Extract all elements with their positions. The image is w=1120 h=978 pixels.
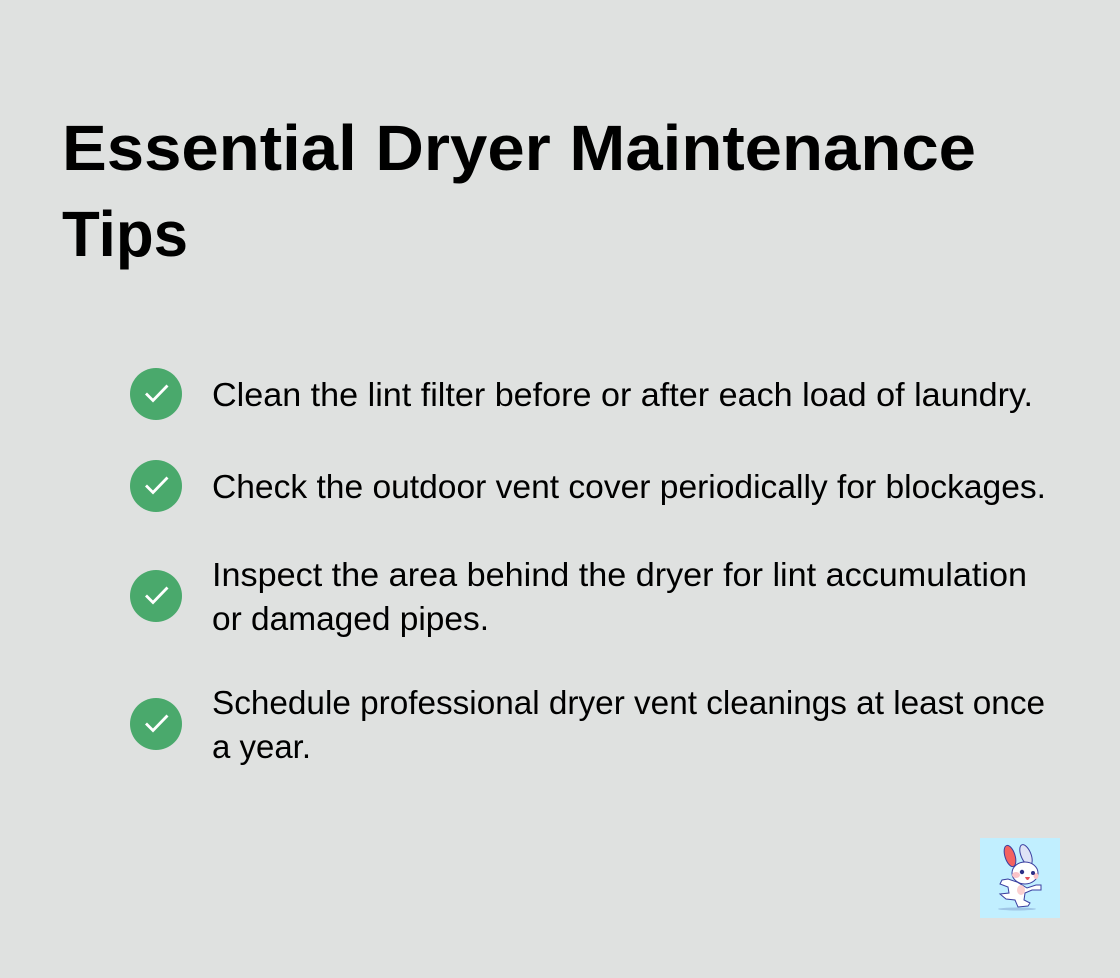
text: item 4 [212,684,1045,765]
item 3 [130,556,1027,637]
text: item 1: Clean the lint filter before or after each load of laundry. [212,376,1033,413]
text: item 2: Check the outdoor vent cover periodically for blockages. [212,468,1046,505]
item 4 [130,684,1045,765]
icon: check 2 [130,460,182,512]
text: item 3: or damaged pipes. [212,600,489,637]
text: item 3: Inspect the area behind the dryer for lint accumulation [212,556,1027,593]
icon: check 1 [130,368,182,420]
icon: check 4 [130,698,182,750]
checklist [130,368,1046,765]
title [62,112,976,270]
title: Essential Dryer Maintenance [62,112,976,184]
text: item 3 [212,556,1027,637]
icon: rabbit logo [980,838,1060,918]
item 1 [130,368,1033,420]
text: item 4: Schedule professional dryer vent cleanings at least once [212,684,1045,721]
icon: check 3 [130,570,182,622]
item 2 [130,460,1046,512]
text: item 4: a year. [212,728,311,765]
title: Tips [62,198,188,270]
